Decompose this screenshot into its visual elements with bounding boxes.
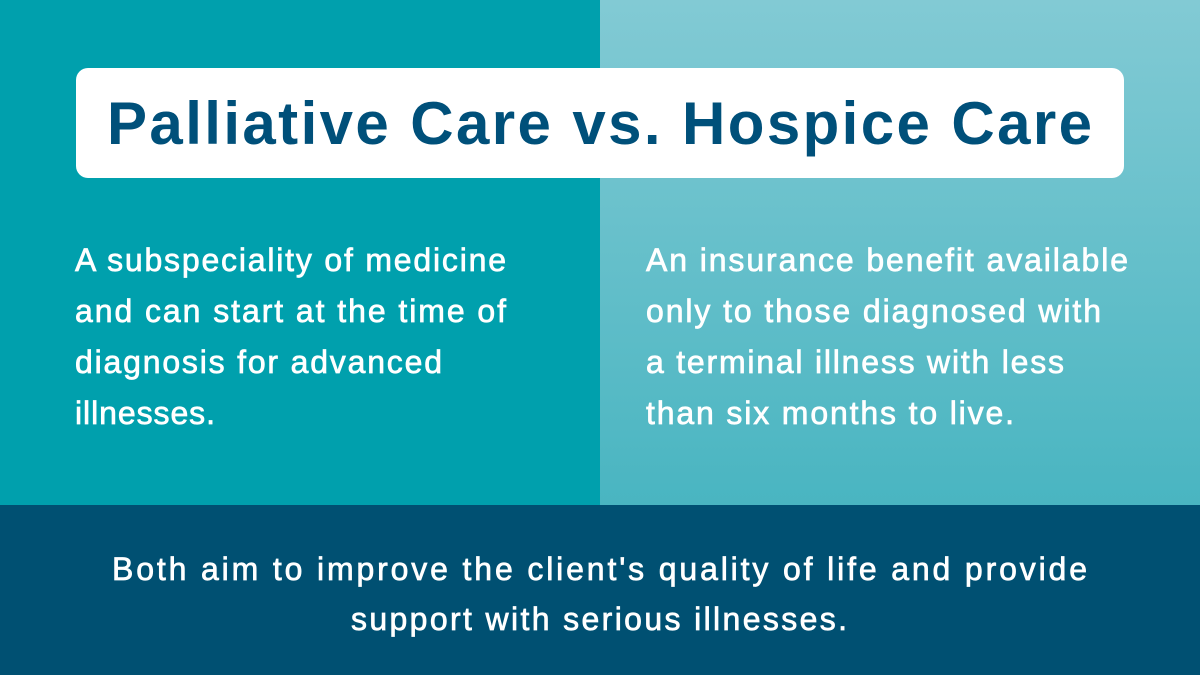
title: Palliative Care vs. Hospice Care xyxy=(107,90,1092,157)
text: palliative care description xyxy=(75,242,506,431)
text: hospice care description: a terminal illness with less xyxy=(646,344,1064,380)
text: hospice care description: only to those diagnosed with xyxy=(646,293,1101,329)
panel: palliative care xyxy=(0,0,600,505)
text: palliative care description: diagnosis for advanced xyxy=(75,344,442,380)
text: summary xyxy=(112,551,1087,637)
text: palliative care description: A subspeciality of medicine xyxy=(75,242,506,278)
title card xyxy=(76,68,1124,178)
text: summary: support with serious illnesses. xyxy=(351,601,847,637)
text: hospice care description: An insurance benefit available xyxy=(646,242,1128,278)
text: hospice care description: than six months to live. xyxy=(646,395,1014,431)
text: palliative care description: and can start at the time of xyxy=(75,293,506,329)
panel: hospice care xyxy=(600,0,1200,505)
text: summary: Both aim to improve the client's quality of life and provide xyxy=(112,551,1087,587)
text: hospice care description xyxy=(646,242,1128,431)
panel: shared summary xyxy=(0,505,1200,675)
text: palliative care description: illnesses. xyxy=(75,395,215,431)
